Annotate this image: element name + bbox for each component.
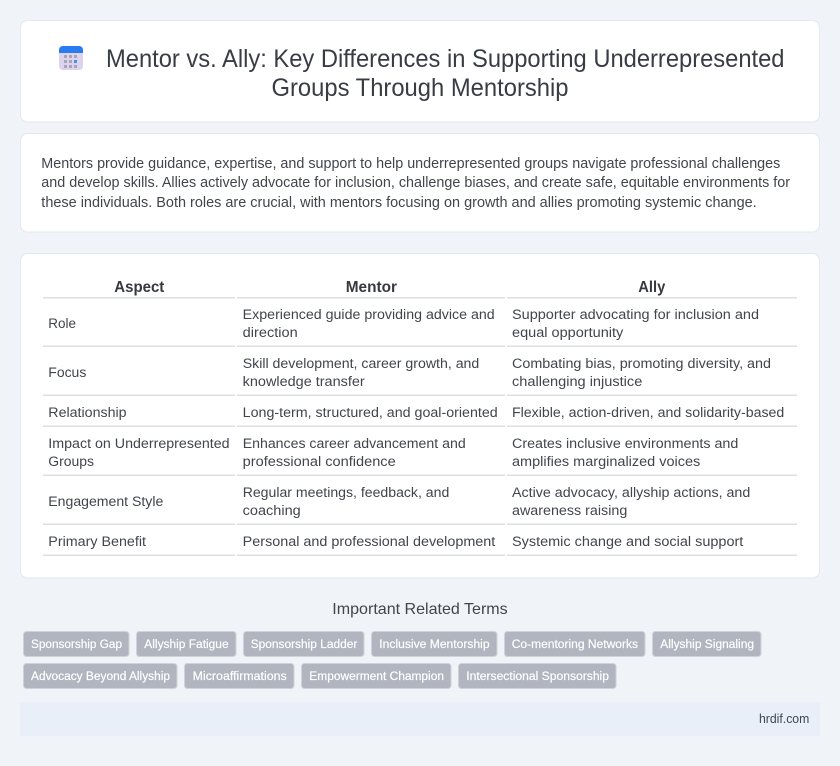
row: Role: direction [243,325,298,341]
tag: Co-mentoring Networks: Co-mentoring Networks [512,637,638,651]
tag: Empowerment Champion [302,664,451,688]
tag: Intersectional Sponsorship: Intersectional Sponsorship [466,669,609,683]
row: Impact on Underrepresented Groups: professional confidence [243,454,396,470]
row: Primary Benefit [43,534,797,556]
row: Engagement Style: awareness raising [512,503,627,519]
row: Focus: Focus [48,365,86,381]
table header: Mentor [346,279,397,296]
panel: summary paragraph: these individuals. Both roles are crucial, with mentors focusing on growth and allies promoting systemic change. [41,195,757,211]
row: Engagement Style: Engagement Style [48,494,163,510]
row: Engagement Style: Regular meetings, feedback, and [243,485,449,501]
row: Engagement Style: coaching [243,503,301,519]
row: Relationship [43,405,797,427]
tag: Co-mentoring Networks [504,632,645,656]
panel: summary paragraph: and develop skills. Allies actively advocate for inclusion, challenge biases, and create safe, equitable environments for [41,175,790,191]
tag: Sponsorship Gap: Sponsorship Gap [31,637,122,651]
tag: Allyship Signaling [652,632,761,656]
row: Engagement Style [43,485,797,525]
row: Role: Role [48,316,76,332]
panel: comparison table [20,254,820,578]
row: Focus [43,356,797,396]
tag: Inclusive Mentorship [372,632,497,656]
panel: summary paragraph [20,134,820,232]
panel: related term tags [24,632,761,688]
tag: Microaffirmations: Microaffirmations [193,669,287,683]
row: Role: Experienced guide providing advice and [243,307,495,323]
row: Impact on Underrepresented Groups: amplifies marginalized voices [512,454,700,470]
row: Role: equal opportunity [512,325,624,341]
row: Relationship: Relationship [48,405,127,421]
tag: Advocacy Beyond Allyship [24,664,177,688]
row: Relationship: Long-term, structured, and goal-oriented [243,405,498,421]
row: Primary Benefit: Systemic change and social support [512,534,743,550]
title [106,45,784,102]
row: Relationship: Flexible, action-driven, and solidarity-based [512,405,784,421]
row: Impact on Underrepresented Groups: Groups [48,454,94,470]
row: Impact on Underrepresented Groups: Enhances career advancement and [243,436,466,452]
row: Impact on Underrepresented Groups [43,436,797,476]
row: Impact on Underrepresented Groups: Impact on Underrepresented [48,436,230,452]
row: Focus: Combating bias, promoting diversity, and [512,356,771,372]
table header: Ally [638,279,665,296]
tag: Allyship Signaling: Allyship Signaling [660,637,754,651]
tag: Sponsorship Gap [24,632,129,656]
panel: summary paragraph: Mentors provide guidance, expertise, and support to help underrepresented groups navigate professional challenges [41,156,780,172]
row: Engagement Style: Active advocacy, allyship actions, and [512,485,750,501]
row: Focus: knowledge transfer [243,374,365,390]
tag: Inclusive Mentorship: Inclusive Mentorship [379,637,490,651]
icon: calendar [59,46,83,70]
row: Role: Supporter advocating for inclusion and [512,307,759,323]
table header: Aspect [114,279,165,296]
tag: Microaffirmations [184,664,294,688]
table header [43,279,797,298]
heading: related terms: Important Related Terms [332,601,508,618]
row: Primary Benefit: Primary Benefit [48,534,146,550]
title: Mentor vs. Ally: Key Differences in Supporting Underrepresented [106,45,784,73]
tag: Empowerment Champion: Empowerment Champion [309,669,444,683]
row: Focus: challenging injustice [512,374,642,390]
tag: Sponsorship Ladder: Sponsorship Ladder [251,637,357,651]
row: Impact on Underrepresented Groups: Creates inclusive environments and [512,436,738,452]
footer: hrdif.com [759,711,809,726]
tag: Intersectional Sponsorship [458,664,616,688]
tag: Sponsorship Ladder [244,632,364,656]
footer [20,702,820,736]
tag: Allyship Fatigue [136,632,236,656]
panel: title card [20,20,820,122]
title: Groups Through Mentorship [272,74,568,102]
row: Primary Benefit: Personal and professional development [243,534,495,550]
row: Role [43,307,797,347]
tag: Advocacy Beyond Allyship: Advocacy Beyond Allyship [31,669,170,683]
tag: Allyship Fatigue: Allyship Fatigue [144,637,229,651]
row: Focus: Skill development, career growth, and [243,356,479,372]
